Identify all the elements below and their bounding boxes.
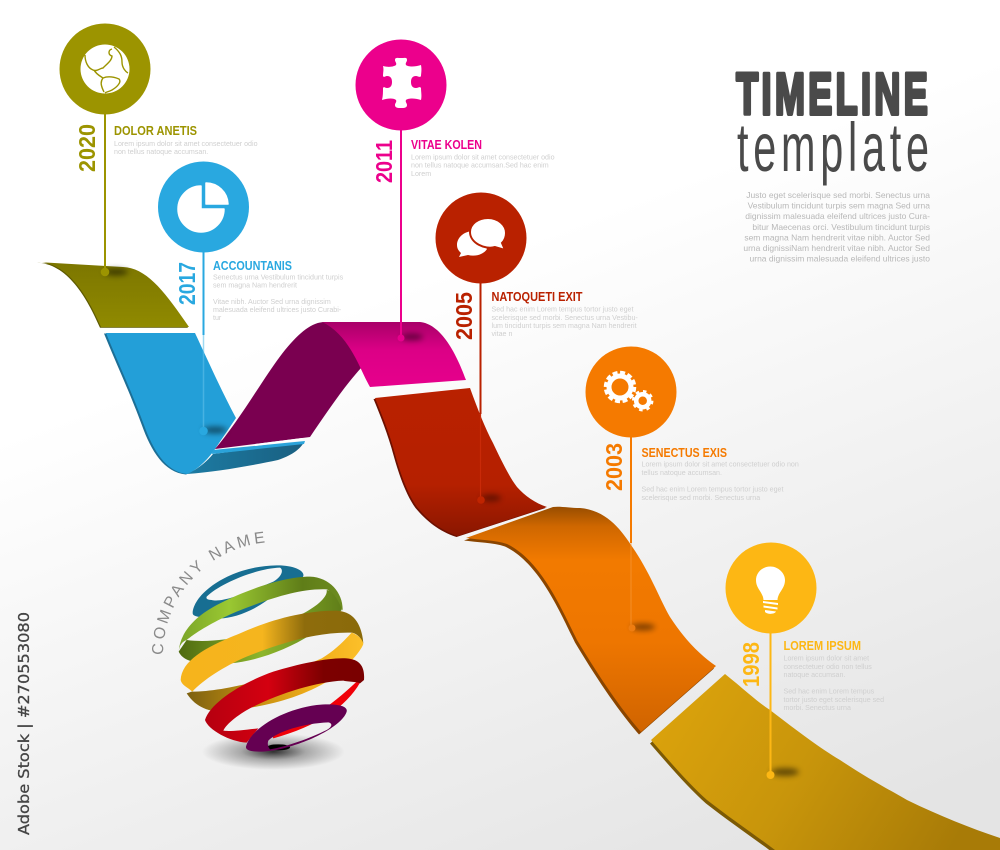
- circle badge: [356, 40, 446, 130]
- text block: natoque accumsan.: [784, 671, 845, 679]
- logo shadow: [202, 733, 345, 770]
- milestone 2003: [586, 346, 799, 632]
- text block: scelerisque sed morbi. Senectus urna Vestibu-: [492, 314, 638, 322]
- intro text block: bitur Maecenas orci. Vestibulum tincidunt turpis: [752, 222, 930, 232]
- circle badge: [726, 542, 816, 634]
- year: 2011: [371, 140, 397, 183]
- heading: DOLOR ANETIS: [114, 123, 197, 138]
- text block: lum tincidunt turpis sem magna Nam hendrerit: [492, 322, 637, 330]
- text block: Vitae nibh. Auctor Sed urna dignissim: [213, 298, 331, 306]
- band: purple: [246, 704, 347, 752]
- text block: tur: [213, 314, 222, 322]
- company name: COMPANY NAME: [152, 532, 265, 654]
- ribbon segment: red: [374, 388, 547, 537]
- ribbon segment: blue: [104, 333, 305, 474]
- text block: Sed hac enim Lorem tempus: [784, 688, 875, 696]
- year: 2003: [601, 443, 627, 491]
- text block: Lorem ipsum dolor sit amet consectetuer odio: [114, 140, 258, 148]
- title: [736, 62, 929, 187]
- text block: [642, 460, 799, 502]
- intro text block: urna dignissiNam hendrerit vitae nibh. Auctor Sed: [743, 243, 930, 253]
- band: blue: [193, 565, 303, 618]
- text block: malesuada eleifend ultrices justo Curabi-: [213, 306, 342, 314]
- circle badge: [586, 346, 676, 438]
- text block: tellus natoque accumsan.: [642, 469, 722, 477]
- year: 2017: [174, 262, 200, 305]
- band: green: [179, 577, 343, 664]
- text block: [411, 154, 555, 178]
- text block: scelerisque sed morbi. Senectus urna: [642, 494, 760, 502]
- icon: speech bubbles: [457, 218, 506, 257]
- icon: light bulb: [756, 566, 785, 614]
- band: red: [205, 658, 364, 743]
- circle badge: [60, 24, 150, 114]
- milestone 2020: [60, 24, 258, 276]
- intro text block: Vestibulum tincidunt turpis sem magna Sed urna: [748, 201, 930, 211]
- heading: SENECTUS EXIS: [642, 445, 727, 460]
- text block: Sed hac enim Lorem tempus tortor justo eget: [492, 306, 633, 314]
- text block: consectetuer odio non tellus: [784, 663, 872, 671]
- circle badge: [158, 162, 249, 252]
- milestone 2017: [158, 162, 344, 435]
- text block: Lorem: [411, 170, 431, 178]
- ribbon segment: purple: [215, 322, 362, 449]
- year: 2005: [451, 292, 477, 340]
- heading: LOREM IPSUM: [784, 638, 861, 653]
- text block: morbi. Senectus urna: [784, 704, 851, 712]
- year: 2020: [74, 124, 100, 172]
- text block: [492, 306, 638, 338]
- text block: tortor justo eget scelerisque sed: [784, 696, 884, 704]
- icon: pie chart: [178, 183, 228, 232]
- text block: [784, 654, 884, 712]
- text block: [213, 274, 344, 322]
- text block: Sed hac enim Lorem tempus tortor justo eget: [642, 486, 783, 494]
- icon: globe: [80, 44, 130, 94]
- title: TIMELINE: [736, 62, 928, 127]
- band: yellow: [181, 611, 363, 712]
- heading: NATOQUETI EXIT: [492, 289, 583, 304]
- ribbon segment: orange: [464, 507, 716, 734]
- icon: puzzle piece: [382, 58, 421, 108]
- winding ribbon: [36, 262, 1000, 850]
- milestone 1998: [726, 542, 884, 779]
- stock credit: Adobe Stock | #270553080: [15, 612, 33, 835]
- intro text block: [743, 190, 930, 264]
- text block: Lorem ipsum dolor sit amet consectetuer odio non: [642, 460, 799, 468]
- title: template: [737, 109, 929, 187]
- milestone 2005: [436, 192, 638, 504]
- text block: [114, 140, 258, 156]
- intro text block: sem magna Nam hendrerit vitae nibh. Auctor Sed: [744, 232, 930, 242]
- text block: vitae n: [492, 330, 512, 338]
- heading: VITAE KOLEN: [411, 137, 482, 152]
- heading: ACCOUNTANIS: [213, 258, 292, 273]
- year: 1998: [738, 642, 764, 687]
- icon: gears: [606, 372, 652, 410]
- text block: non tellus natoque accumsan.Sed hac enim: [411, 162, 549, 170]
- text block: Senectus urna Vestibulum tincidunt turpis: [213, 274, 344, 282]
- ribbon segment: olive: [36, 262, 189, 328]
- text block: sem magna Nam hendrerit: [213, 282, 297, 290]
- text block: Lorem ipsum dolor sit amet: [784, 654, 869, 662]
- intro text block: Justo eget scelerisque sed morbi. Senectus urna: [746, 190, 930, 200]
- ribbon segment: ochre: [650, 674, 1000, 850]
- text block: non tellus natoque accumsan.: [114, 148, 208, 156]
- intro text block: dignissim malesuada eleifend ultrices justo Cura-: [745, 211, 930, 221]
- milestone 2011: [356, 40, 555, 342]
- company logo: [179, 565, 364, 770]
- intro text block: urna dignissim malesuada eleifend ultrices justo: [750, 254, 930, 264]
- ribbon segment: pink: [322, 322, 466, 387]
- circle badge: [436, 192, 526, 284]
- text block: Lorem ipsum dolor sit amet consectetuer odio: [411, 154, 555, 162]
